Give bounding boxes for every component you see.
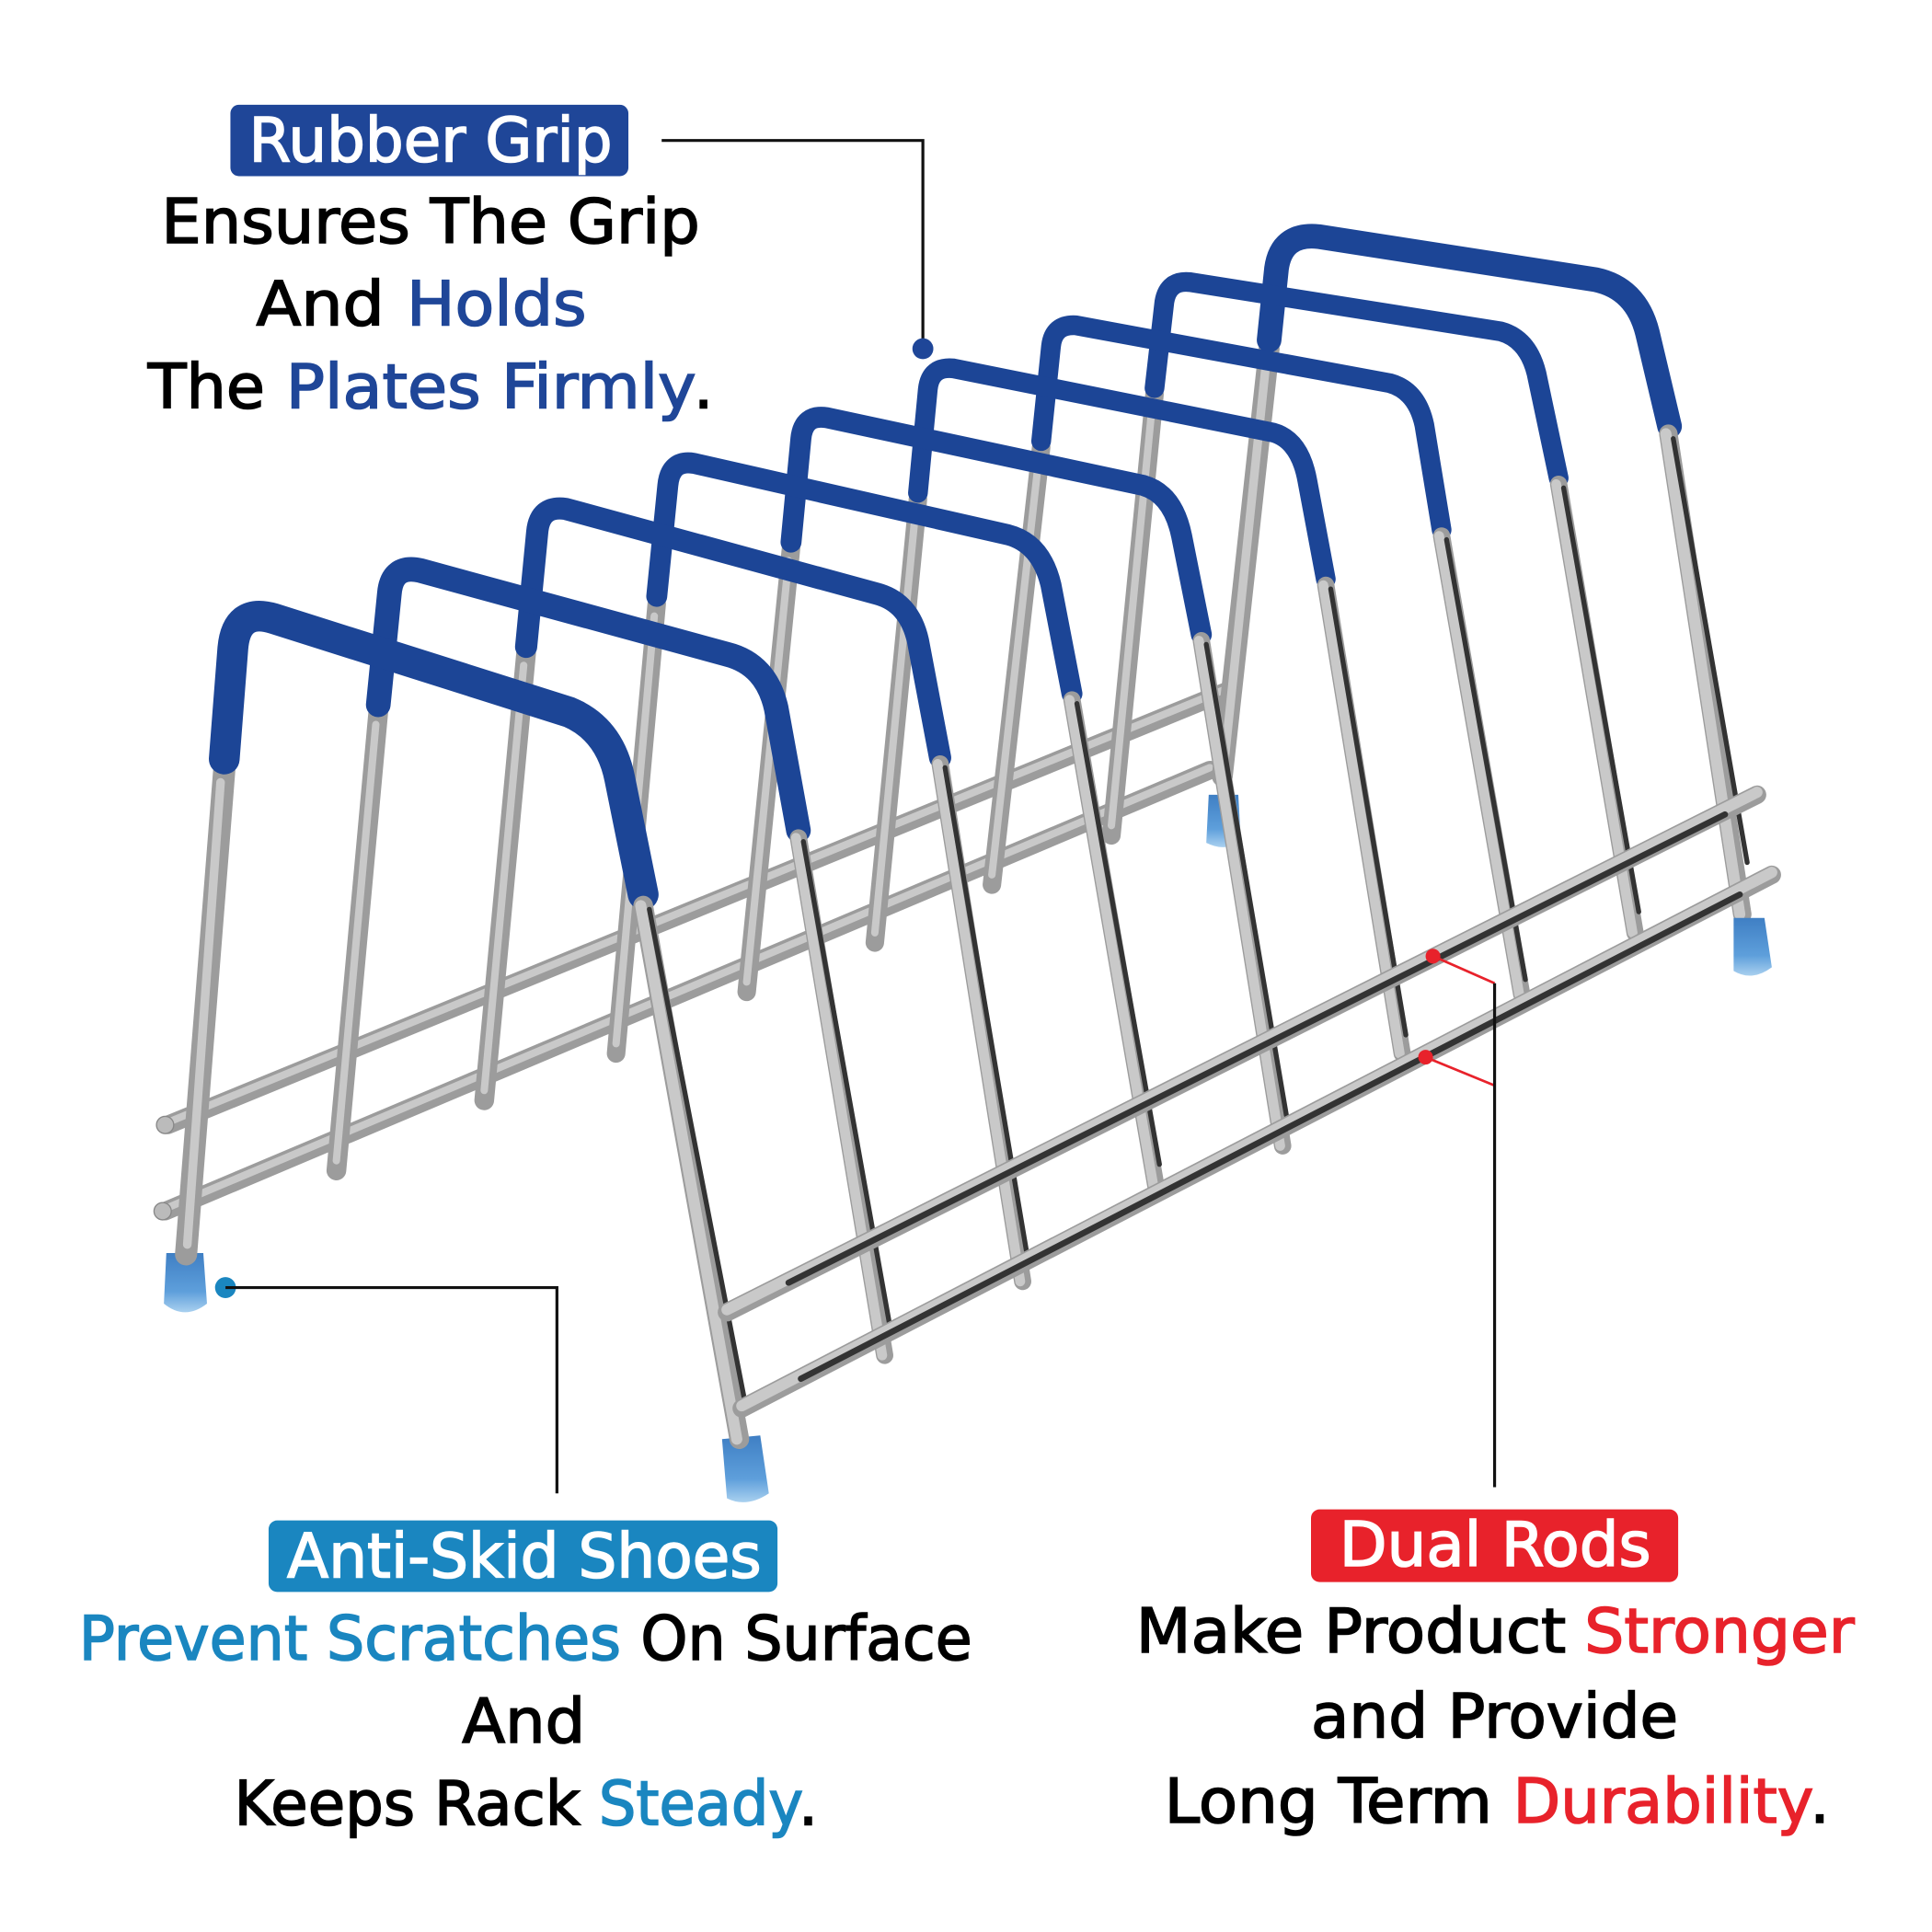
panel: rubber grip text bbox=[147, 104, 713, 422]
foot: rear right shoe bbox=[1206, 795, 1241, 847]
description: anti-skid shoes: And bbox=[462, 1685, 585, 1757]
frame 5 bbox=[747, 417, 1286, 1146]
frame 4 bbox=[616, 463, 1159, 1185]
panel: dual rods text bbox=[1136, 1509, 1855, 1837]
panel: anti-skid shoes text bbox=[79, 1520, 972, 1839]
callout: rubber grip leader line bbox=[661, 141, 934, 359]
frame 9 (rear) bbox=[1223, 236, 1747, 914]
description: anti-skid shoes: Keeps Rack bbox=[234, 1767, 581, 1839]
description: anti-skid shoes: . bbox=[799, 1767, 818, 1839]
frame 6 bbox=[875, 368, 1406, 1053]
description: rubber grip bbox=[147, 186, 713, 422]
frame 7 bbox=[992, 326, 1525, 995]
description: rubber grip: Plates Firmly bbox=[286, 351, 696, 422]
badge: anti-skid shoes: Anti-Skid Shoes bbox=[287, 1520, 762, 1592]
description: rubber grip: The bbox=[147, 351, 265, 422]
frame 8 bbox=[1111, 282, 1639, 933]
callout: dual rods leader line bbox=[1419, 949, 1495, 1488]
description: anti-skid shoes: Steady bbox=[599, 1767, 803, 1839]
frame 1 (front) bbox=[186, 616, 745, 1439]
description: anti-skid shoes bbox=[79, 1603, 972, 1839]
badge: rubber grip: Rubber Grip bbox=[249, 104, 613, 176]
description: dual rods: Durability bbox=[1513, 1765, 1813, 1837]
description: rubber grip: . bbox=[694, 351, 713, 422]
rear rods bbox=[154, 687, 1230, 1220]
description: anti-skid shoes: Prevent Scratches bbox=[79, 1603, 621, 1674]
description: dual rods bbox=[1136, 1595, 1855, 1837]
description: dual rods: . bbox=[1810, 1765, 1830, 1837]
foot: front left shoe bbox=[164, 1253, 207, 1312]
description: anti-skid shoes: On Surface bbox=[640, 1603, 972, 1674]
description: dual rods: Long Term bbox=[1165, 1765, 1492, 1837]
description: rubber grip: Ensures The Grip bbox=[161, 186, 700, 258]
description: dual rods: and Provide bbox=[1311, 1680, 1678, 1752]
callout: anti-skid leader line bbox=[215, 1277, 557, 1493]
foot: front centre shoe bbox=[722, 1435, 769, 1502]
frame 2 bbox=[337, 569, 890, 1355]
description: dual rods: Make Product bbox=[1136, 1595, 1566, 1667]
frame 3 bbox=[484, 509, 1027, 1282]
description: rubber grip: And bbox=[257, 269, 385, 340]
front rods bbox=[727, 792, 1772, 1409]
description: dual rods: Stronger bbox=[1584, 1595, 1855, 1667]
badge: dual rods: Dual Rods bbox=[1340, 1509, 1651, 1581]
description: rubber grip: Holds bbox=[407, 269, 587, 340]
foot: right shoe bbox=[1733, 918, 1772, 976]
